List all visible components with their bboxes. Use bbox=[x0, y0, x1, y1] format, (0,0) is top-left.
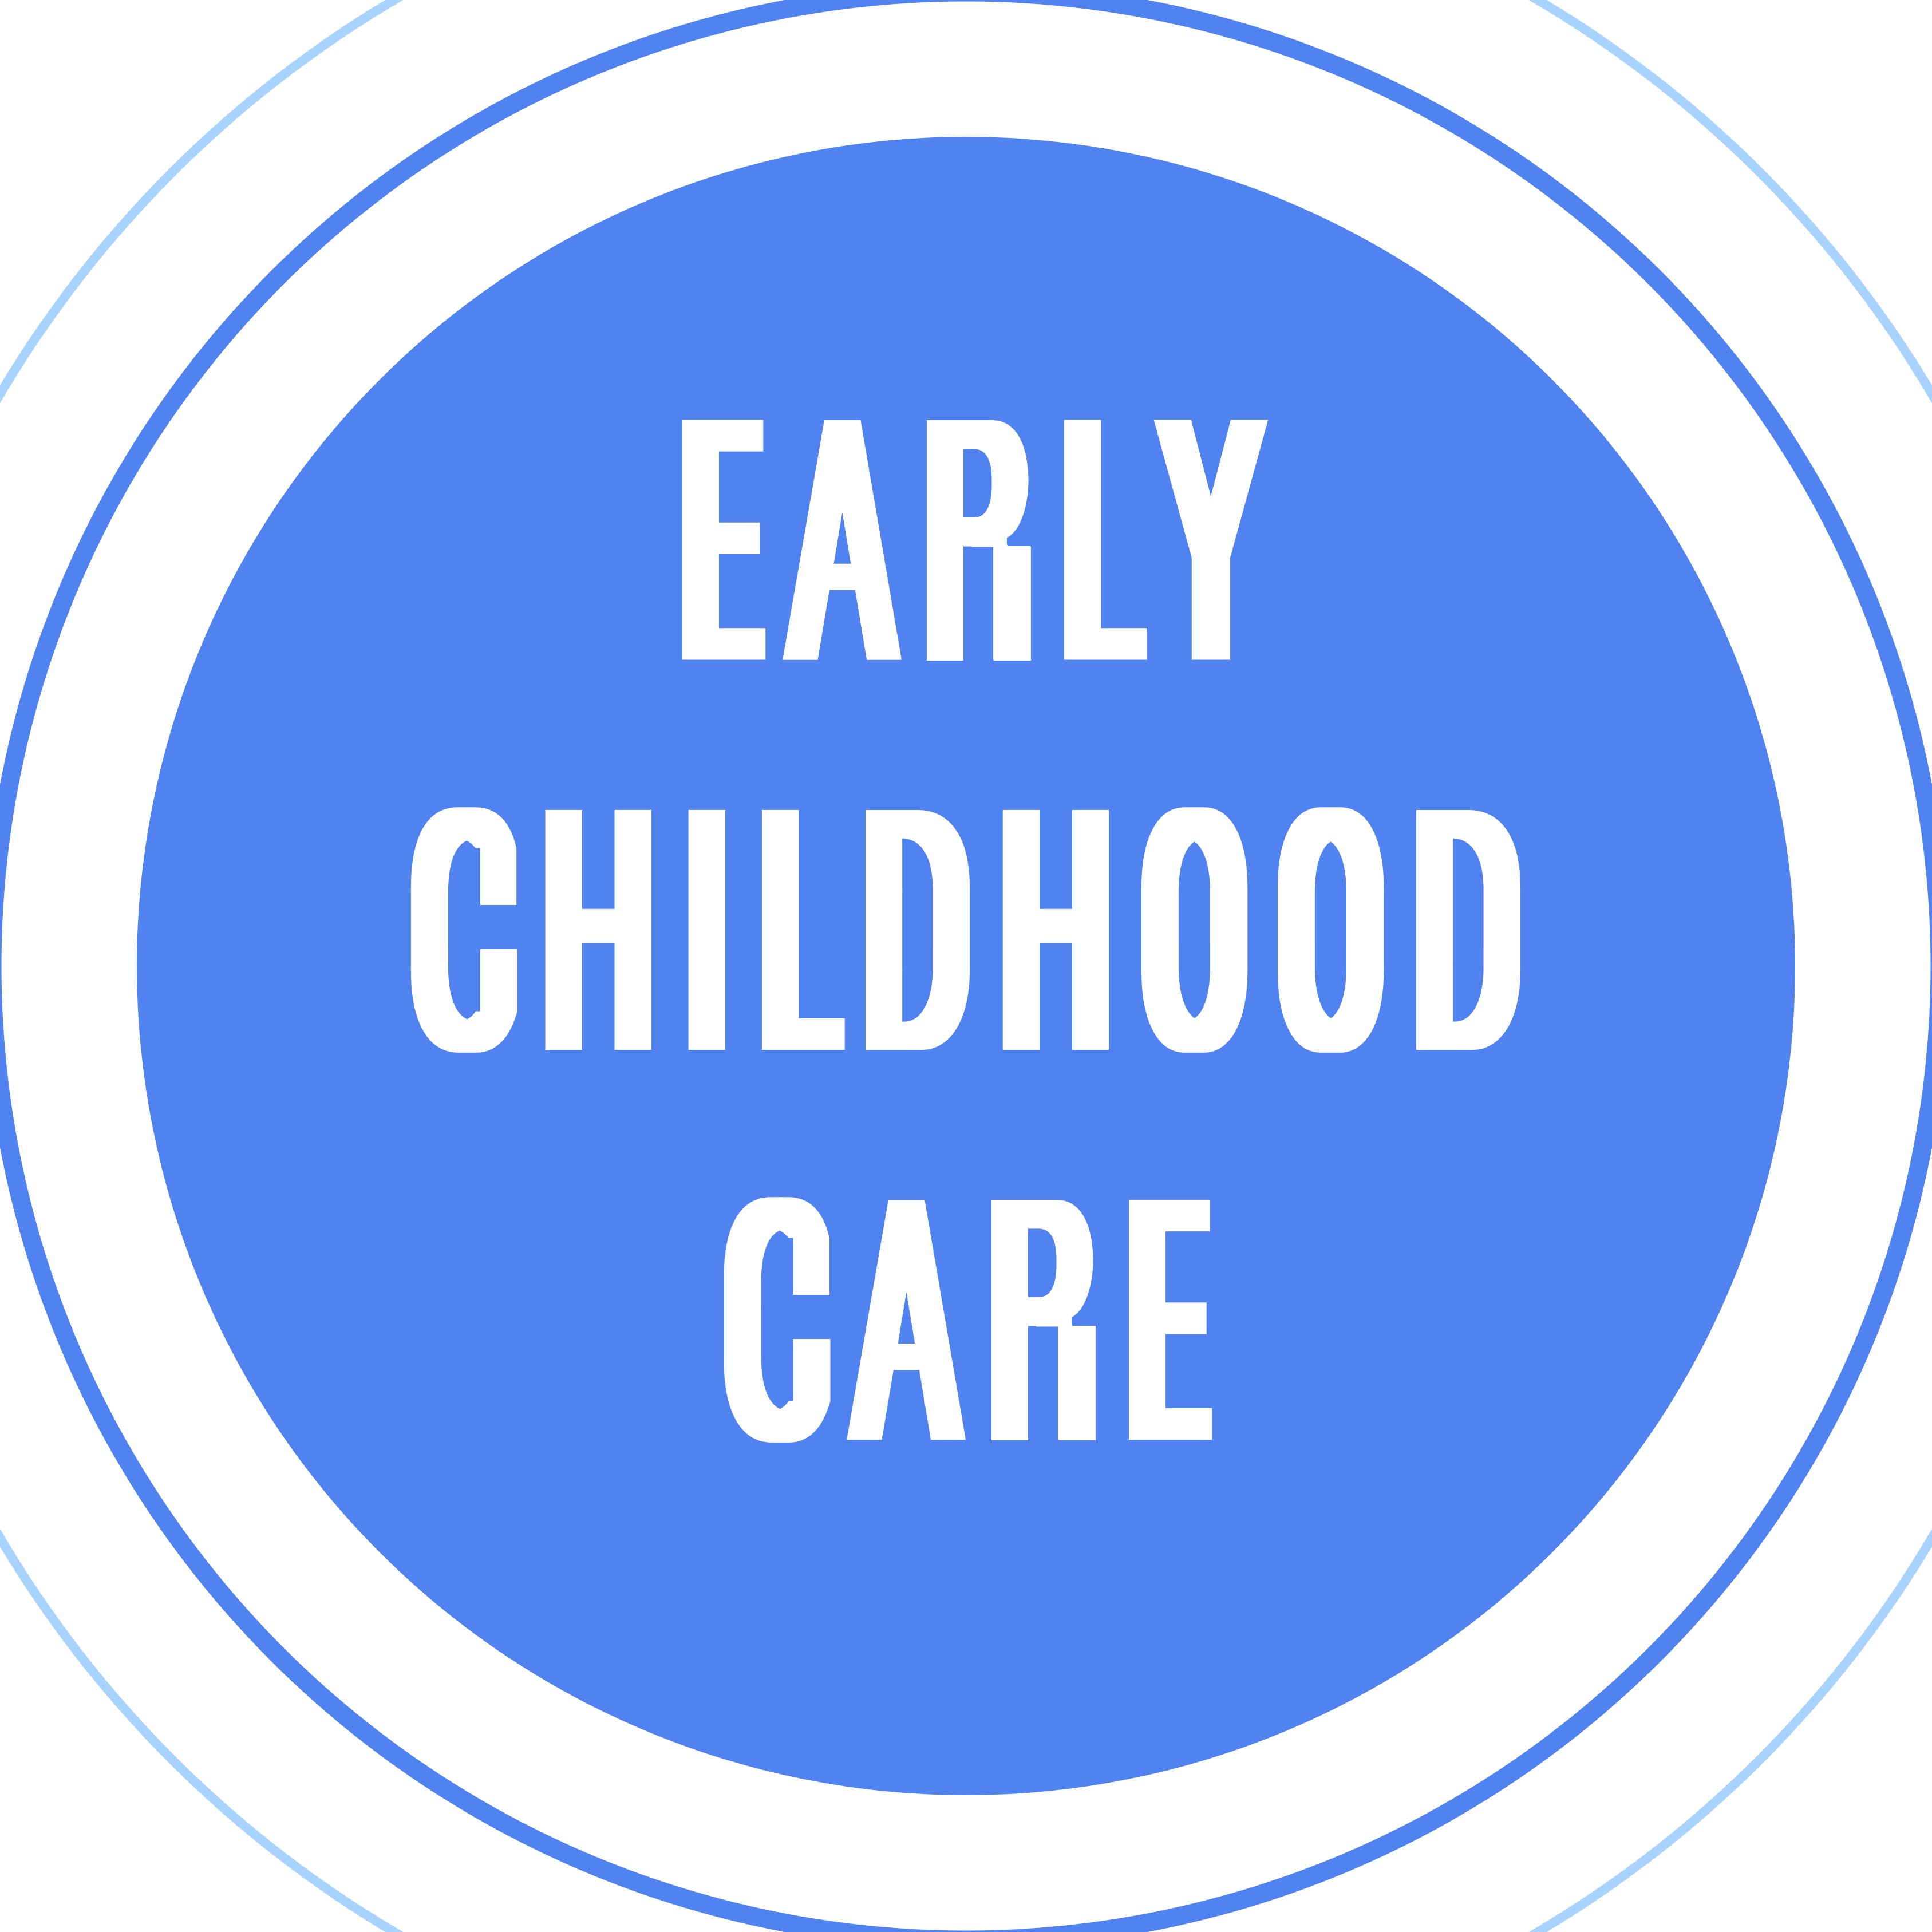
title line: EARLY: Y bbox=[1156, 337, 1266, 741]
title line: CARE: E bbox=[1132, 1117, 1206, 1520]
title line: CHILDHOOD: D bbox=[1415, 762, 1519, 1018]
title line: CHILDHOOD: C bbox=[414, 762, 513, 1018]
title line: EARLY: R bbox=[925, 351, 1028, 696]
title line: CHILDHOOD: O bbox=[1282, 764, 1380, 1019]
title: EARLY CHILDHOOD CARE bbox=[414, 337, 1519, 1520]
title line: CHILDHOOD bbox=[414, 727, 1519, 1132]
title line: CHILDHOOD: L bbox=[763, 728, 839, 1132]
central filled blue circle bbox=[137, 137, 1795, 1795]
title line: CHILDHOOD: H bbox=[542, 727, 655, 1131]
title line: EARLY bbox=[685, 337, 1266, 741]
title line: CARE bbox=[727, 1117, 1206, 1520]
title line: EARLY: E bbox=[685, 337, 760, 741]
title line: CARE: C bbox=[727, 1152, 827, 1408]
title line: CHILDHOOD: D bbox=[864, 762, 968, 1018]
title line: CHILDHOOD: I bbox=[687, 727, 727, 1131]
title line: CARE: A bbox=[857, 1125, 956, 1513]
title line: CARE: R bbox=[990, 1131, 1093, 1476]
title line: CHILDHOOD: H bbox=[999, 727, 1112, 1131]
title line: EARLY: L bbox=[1065, 338, 1141, 741]
title line: EARLY: A bbox=[793, 345, 892, 733]
title line: CHILDHOOD: O bbox=[1146, 764, 1243, 1019]
